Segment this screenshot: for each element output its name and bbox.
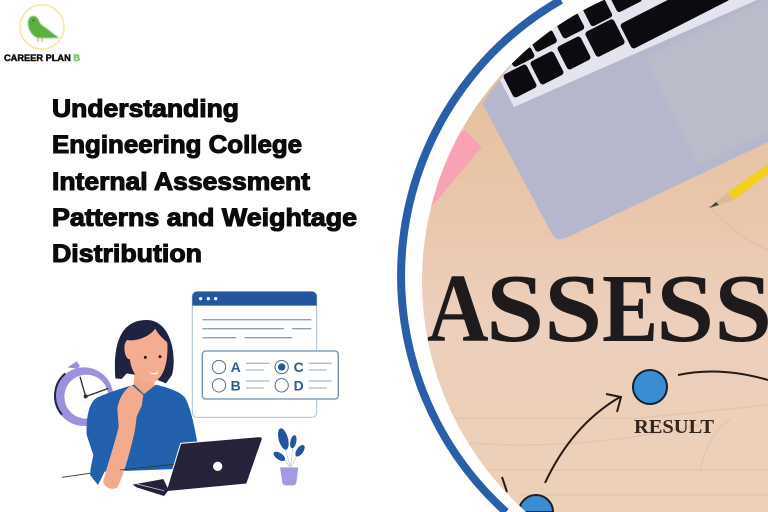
answer options panel: D [294, 377, 304, 393]
wood grain [430, 205, 768, 495]
ASSESS heading: S [486, 254, 544, 362]
circular desk photo [420, 0, 768, 512]
blue ring [401, 0, 561, 512]
ASSESS heading: E [602, 254, 658, 362]
logo: Career Plan B [4, 5, 80, 64]
pink sticky note [432, 130, 482, 206]
woman: hair [115, 320, 174, 383]
ASSESS heading [428, 276, 768, 342]
arrow to result [545, 394, 621, 483]
ASSESS heading: S [656, 254, 714, 362]
title: Distribution [52, 240, 202, 268]
potted plant [272, 427, 307, 485]
woman: blue shirt [87, 385, 198, 485]
arrow leaving result [678, 371, 768, 380]
logo ring [20, 5, 64, 49]
ASSESS heading: A [427, 254, 489, 362]
desk line [62, 464, 173, 477]
arrow tick near lower node [502, 477, 507, 492]
woman: neck and face [124, 329, 167, 397]
laptop [133, 437, 262, 496]
answer options panel [202, 351, 338, 399]
keyboard well [500, 0, 757, 107]
trackpad [647, 0, 768, 163]
wood background [420, 0, 768, 512]
result node [633, 370, 667, 404]
title: Internal Assessment [52, 168, 311, 196]
icon: green bird [28, 16, 59, 42]
answer options panel: A [231, 359, 241, 375]
title: Understanding [52, 95, 239, 123]
keys [503, 0, 730, 98]
quiz window [192, 292, 317, 417]
answer options panel: B [231, 377, 241, 393]
RESULT label: RESULT [634, 416, 715, 438]
ASSESS heading: S [544, 254, 602, 362]
title [52, 95, 357, 268]
logo text: CAREER PLAN B [4, 53, 80, 64]
answer options panel: C [294, 359, 304, 375]
illustration: student taking online test [55, 292, 338, 496]
pencil [709, 164, 768, 208]
lower node [519, 495, 553, 512]
stopwatch [55, 361, 113, 426]
title: Engineering College [52, 131, 302, 159]
laptop [482, 0, 768, 239]
title: Patterns and Weightage [52, 204, 357, 232]
woman: arm and hand [103, 385, 143, 489]
